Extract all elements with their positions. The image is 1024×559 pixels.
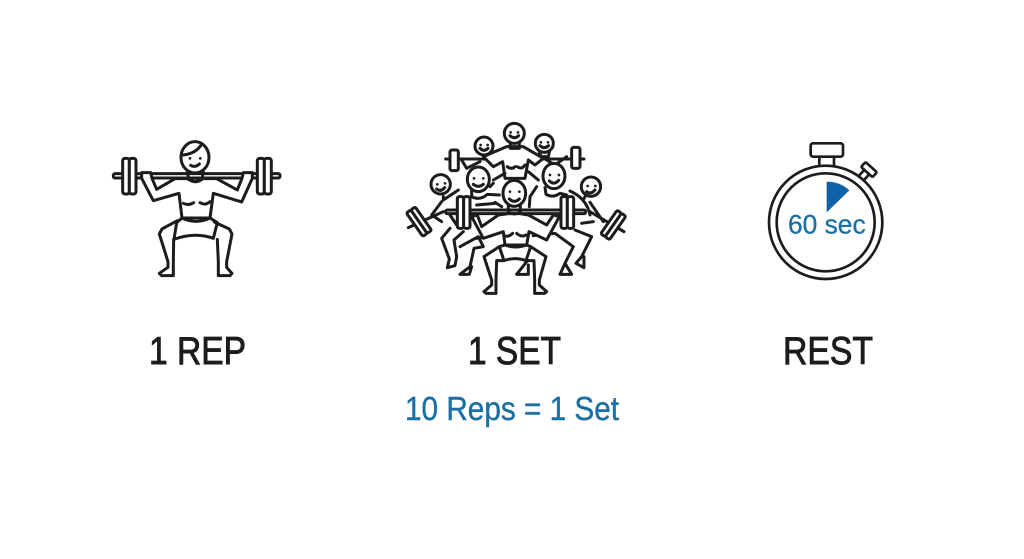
far left lifter <box>406 175 463 268</box>
back right lifter head <box>535 134 553 157</box>
icon: single squatting lifter <box>113 142 280 276</box>
icon: stopwatch <box>769 143 882 279</box>
far right lifter <box>570 177 626 268</box>
back left lifter head <box>475 137 493 155</box>
icon: group of lifters forming one set <box>406 123 626 293</box>
stopwatch dial <box>769 166 882 279</box>
label: 1 SET: 1 SET <box>468 330 561 373</box>
stopwatch label: 60 sec <box>788 209 866 239</box>
label: REST: REST <box>783 330 873 373</box>
middle left lifter <box>450 167 502 274</box>
stopwatch crown <box>811 143 843 168</box>
middle right lifter <box>517 163 573 274</box>
countdown wedge <box>827 182 849 212</box>
caption: 10 Reps = 1 Set: 10 Reps = 1 Set <box>405 390 619 427</box>
stopwatch side button <box>856 162 877 183</box>
back centre lifter <box>483 123 543 178</box>
front lifter <box>446 180 586 293</box>
label: 1 REP: 1 REP <box>149 330 246 373</box>
back row bar <box>446 147 584 171</box>
